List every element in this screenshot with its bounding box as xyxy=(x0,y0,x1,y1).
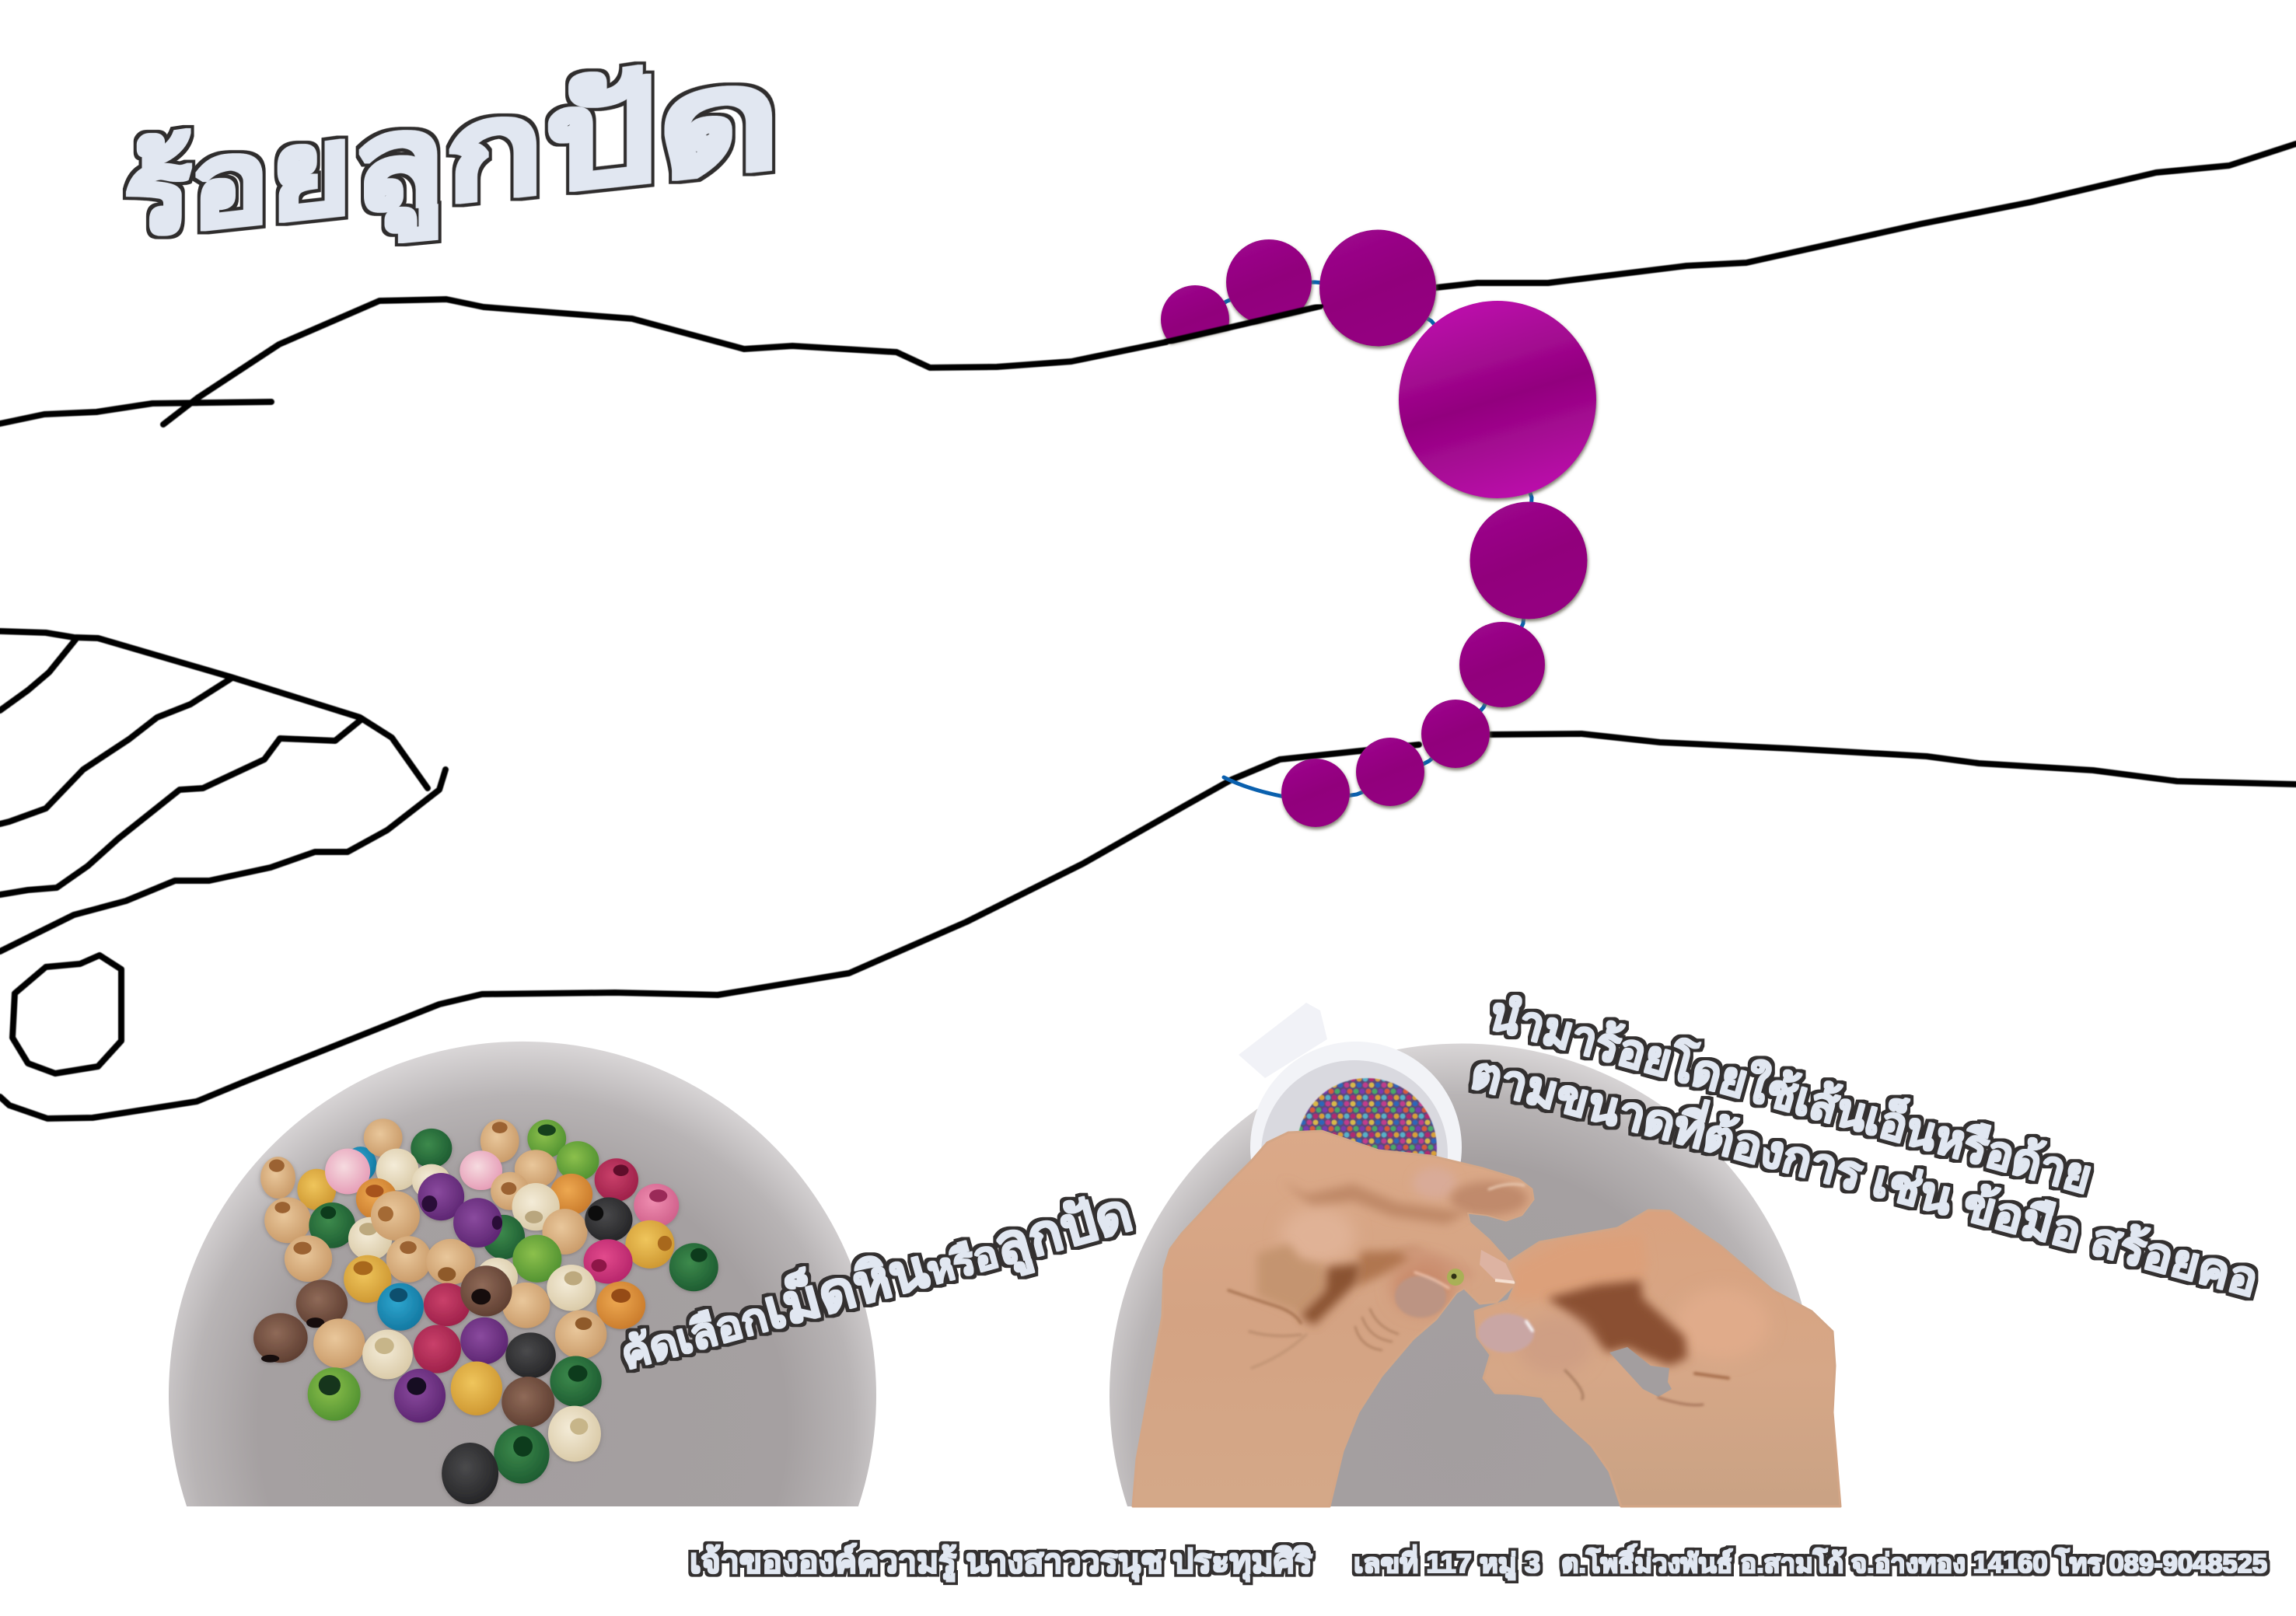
wrist line over the small beads xyxy=(1166,306,1320,342)
seed beads xyxy=(1297,1078,1437,1218)
bowl handle xyxy=(1239,1003,1327,1078)
right hand shading xyxy=(1515,1270,1760,1371)
small bead between fingers xyxy=(1447,1269,1464,1286)
address and phone: ต.โพธิ์ม่วงพันธ์ อ.สามโก้ จ.อ่างทอง 14160 โทร 089-9048525 xyxy=(1561,1544,2267,1579)
right hand creases xyxy=(1526,1321,1728,1405)
knowledge owner: เจ้าขององค์ความรู้ นางสาววรนุช ประทุมศิริ xyxy=(690,1543,1312,1582)
fingernail xyxy=(1480,1250,1516,1283)
title: ร้อยลูกปัด xyxy=(124,24,603,267)
bead 6 xyxy=(1459,622,1545,707)
bead 7 xyxy=(1421,700,1490,768)
photo: left hand holding a bead xyxy=(1133,1131,1533,1506)
left hand shading xyxy=(1257,1167,1528,1325)
caption: select beads: คัดเลือกเม็ดหินหรือลูกปัด xyxy=(612,1178,1140,1384)
beads clipped by the wrist xyxy=(1161,239,1312,354)
bracelet beads xyxy=(1161,230,1596,827)
bead 9 xyxy=(1281,759,1350,827)
left hand base xyxy=(1133,1131,1533,1506)
bowl rim xyxy=(1250,1042,1462,1253)
photo: right hand pinching thread xyxy=(1475,1210,1840,1506)
footer credit xyxy=(690,1543,2267,1582)
panel: threading disc xyxy=(1110,1043,1814,1506)
caption line 1: นำมาร้อยโดยใช้เส้นเอ็นหรือด้าย xyxy=(1484,985,2098,1203)
panel: bead selection disc xyxy=(169,1042,876,1506)
photo: small bowl of seed beads xyxy=(1239,1003,1462,1253)
nail tip xyxy=(1495,1280,1516,1283)
bead 8 xyxy=(1356,738,1424,806)
caption line 2: ตามขนาดที่ต้องการ เช่น ข้อมือ สร้อยคอ xyxy=(1466,1039,2266,1307)
photo: coloured wooden beads xyxy=(253,1119,718,1504)
right thumb nail xyxy=(1478,1314,1534,1352)
thumb nail xyxy=(1395,1276,1446,1318)
bowl inside xyxy=(1261,1060,1448,1247)
gap between finger and thumb xyxy=(1609,1347,1672,1397)
large centre bead xyxy=(1399,301,1596,498)
bead 5 xyxy=(1470,502,1588,619)
house number: เลขที่ 117 หมู่ 3 xyxy=(1354,1544,1540,1580)
right hand base xyxy=(1475,1210,1840,1506)
bead 3 xyxy=(1319,230,1436,347)
caption: threading instructions xyxy=(1466,985,2266,1307)
hand and arm line drawing xyxy=(0,144,2296,1119)
left hand creases xyxy=(1228,1184,1524,1368)
blue bracelet thread xyxy=(1195,282,1532,801)
